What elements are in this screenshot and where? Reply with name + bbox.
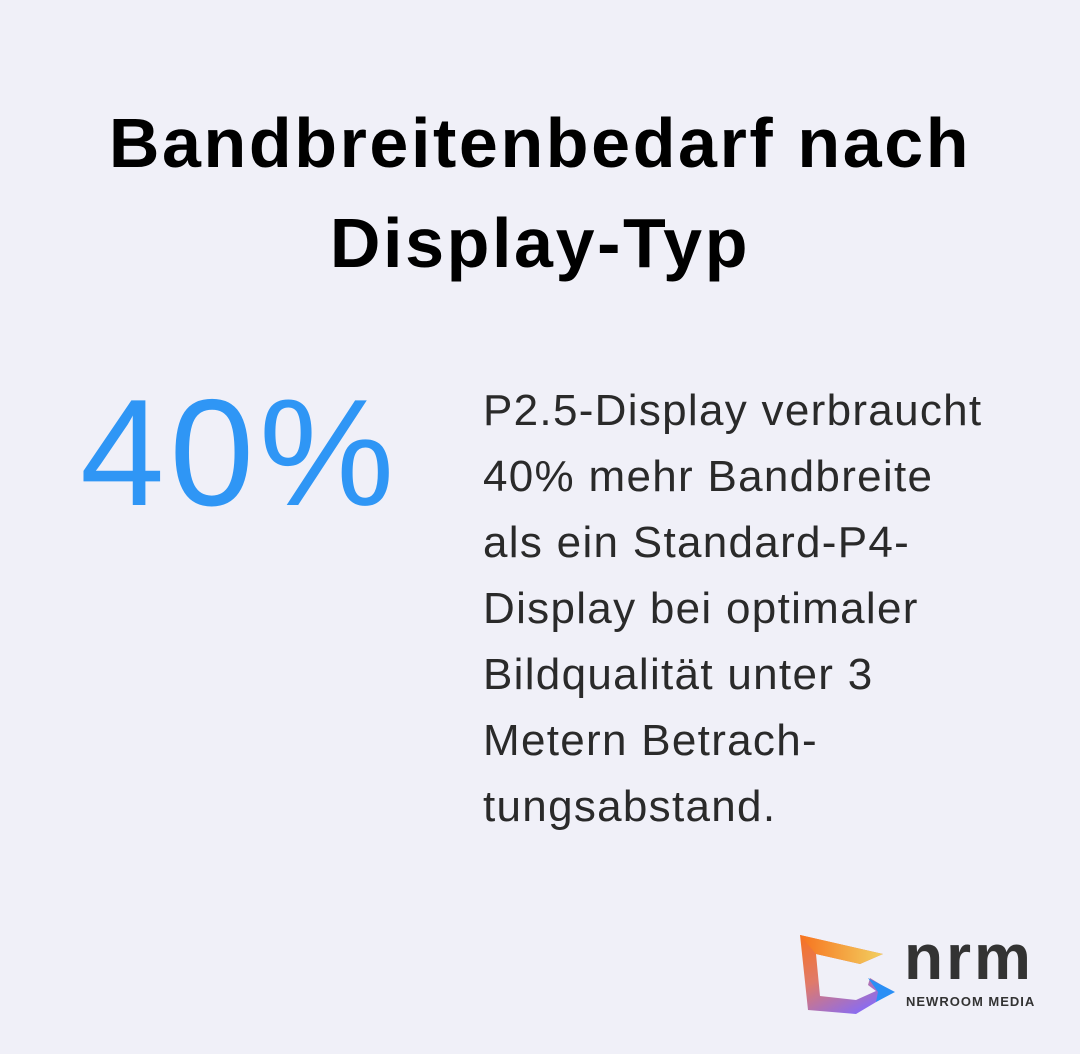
big stat: 40%	[80, 368, 399, 538]
title: Display-Typ	[330, 204, 750, 282]
description text	[483, 386, 982, 831]
description text: Metern Betrach-	[483, 716, 818, 765]
logo text: nrm	[904, 921, 1034, 993]
icon: logo mark	[800, 935, 895, 1014]
description text: als ein Standard-P4-	[483, 518, 910, 567]
description text: tungsabstand.	[483, 782, 776, 831]
description text: Display bei optimaler	[483, 584, 919, 633]
description text: 40% mehr Bandbreite	[483, 452, 933, 501]
logo	[800, 921, 1035, 1014]
title: Bandbreitenbedarf nach	[109, 104, 971, 182]
title	[109, 104, 971, 282]
logo: NEWROOM MEDIA	[906, 994, 1035, 1009]
description text: P2.5-Display verbraucht	[483, 386, 982, 435]
description text: Bildqualität unter 3	[483, 650, 873, 699]
